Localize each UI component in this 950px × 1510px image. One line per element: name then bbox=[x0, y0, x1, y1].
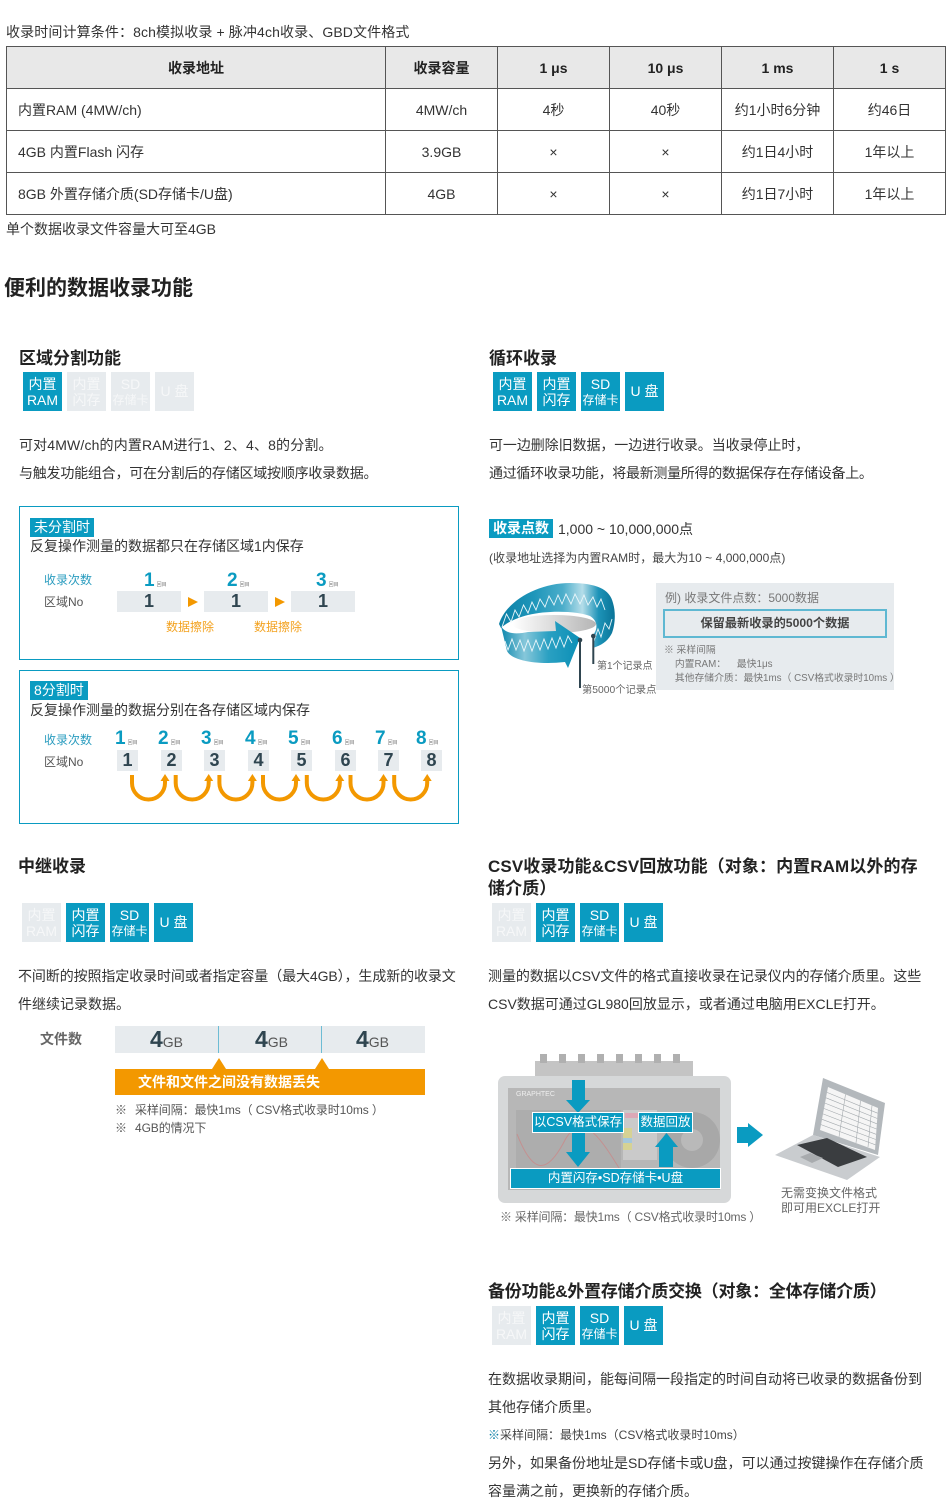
text: 8 divisions description: 反复操作测量的数据分别在各存储区域内保存 bbox=[30, 702, 310, 718]
text: area division description: 可对4MW/ch的内置RAM进行1、2、4、8的分割。 bbox=[19, 437, 333, 453]
table: recording capacity: 1年以上 bbox=[865, 144, 914, 160]
label: data erase 2: 数据擦除 bbox=[254, 620, 302, 634]
label: data erase 1: 数据擦除 bbox=[166, 620, 214, 634]
text: opens in EXCEL: 无需变换文件格式 bbox=[781, 1186, 877, 1200]
badges: loop recording storage: 内置 bbox=[542, 376, 570, 392]
table: recording capacity: 约46日 bbox=[868, 102, 911, 118]
badges: backup storage: 内置 bbox=[498, 1310, 526, 1326]
counts 1 to 8: 6 回目 bbox=[332, 728, 355, 749]
table: recording capacity: 约1日4小时 bbox=[742, 144, 813, 160]
text: opens in EXCEL: 即可用EXCLE打开 bbox=[781, 1200, 880, 1214]
table: recording capacity: 40秒 bbox=[651, 102, 680, 118]
badges: CSV storage: 存储卡 bbox=[581, 924, 618, 938]
text: backup description: ※采样间隔：最快1ms（CSV格式收录时10ms） bbox=[488, 1428, 745, 1442]
table: recording capacity: × bbox=[661, 144, 670, 160]
text: sampling interval note: ※ 采样间隔 bbox=[664, 645, 716, 656]
tag: without division: 未分割时 bbox=[34, 519, 90, 535]
area cell 1 bbox=[117, 591, 181, 612]
label: storage media bbox=[510, 1168, 721, 1189]
area cells 1 to 8: 8 bbox=[426, 750, 436, 770]
badges: area division storage bbox=[23, 372, 194, 411]
badges: relay recording storage: SD bbox=[120, 907, 139, 923]
table: recording capacity: 4MW/ch bbox=[416, 102, 467, 118]
counts 1 to 8: 8 回目 bbox=[416, 728, 439, 749]
badges: CSV storage: 内置 bbox=[542, 907, 570, 923]
label: record count: 收录次数 bbox=[44, 573, 92, 587]
label: save as CSV bbox=[532, 1112, 624, 1133]
text: backup description: 容量满之前，更换新的存储介质。 bbox=[488, 1483, 698, 1499]
text: sampling interval note: 其他存储介质：最快1ms（ CSV格式收录时10ms ） bbox=[675, 673, 900, 684]
heading: CSV recording: CSV收录功能&CSV回放功能（对象：内置RAM以外的存 bbox=[488, 857, 918, 876]
label: area number: 区域No bbox=[44, 755, 83, 769]
counts 1 to 8: 7 回目 bbox=[375, 728, 398, 749]
badges: CSV storage: U 盘 bbox=[630, 914, 658, 930]
table: recording capacity: 4秒 bbox=[543, 102, 564, 118]
table: recording capacity: 1 ms bbox=[762, 60, 793, 76]
area cell 1: 1 bbox=[144, 591, 154, 611]
counts 1 to 8: 2 回目 bbox=[158, 728, 181, 749]
text: file capacity note: 单个数据收录文件容量大可至4GB bbox=[6, 221, 216, 237]
badges: loop recording storage: 存储卡 bbox=[582, 393, 618, 407]
chart: file segments: 4GB bbox=[356, 1026, 389, 1052]
arrow: to laptop bbox=[737, 1123, 763, 1147]
area cell 2 bbox=[204, 591, 268, 612]
text: relay recording description bbox=[18, 968, 456, 1012]
text: sampling interval note bbox=[664, 644, 900, 684]
badges: loop recording storage: U 盘 bbox=[630, 383, 658, 399]
area cells 1 to 8: 4 bbox=[253, 750, 264, 770]
chart: file segments bbox=[115, 1026, 425, 1053]
table: recording capacity: 4GB 内置Flash 闪存 bbox=[18, 144, 144, 160]
heading: CSV recording bbox=[488, 857, 918, 898]
text: backup description: 另外，如果备份地址是SD存储卡或U盘，可以通过按键操作在存储介质 bbox=[488, 1455, 924, 1471]
table: recording capacity: 收录容量 bbox=[414, 60, 470, 76]
panel: backup function bbox=[488, 1282, 924, 1499]
badges: loop recording storage: 闪存 bbox=[542, 392, 570, 408]
text: internal RAM range: (收录地址选择为内置RAM时，最大为10 ~ 4,000,000点) bbox=[489, 551, 785, 565]
count: third: 3 回目 bbox=[316, 570, 339, 591]
panel: CSV recording and playback bbox=[488, 857, 921, 1224]
badges: area division storage: SD bbox=[121, 376, 140, 392]
heading: relay recording: 中继收录 bbox=[18, 857, 86, 876]
counts 1 to 8 bbox=[115, 728, 439, 749]
text: recording points range: 1,000 ~ 10,000,000点 bbox=[558, 521, 693, 537]
text: relay notes: 采样间隔：最快1ms（ CSV格式收录时10ms ） bbox=[135, 1103, 384, 1117]
badges: area division storage: 存储卡 bbox=[112, 393, 148, 407]
icon: logger device bbox=[498, 1054, 731, 1203]
text: sampling interval note: 内置RAM： 最快1μs bbox=[675, 659, 773, 670]
text: relay notes: ※ bbox=[115, 1121, 127, 1135]
heading: area division: 区域分割功能 bbox=[19, 349, 121, 368]
badges: CSV storage bbox=[492, 903, 663, 942]
icon: laptop bbox=[775, 1078, 885, 1180]
table: recording capacity: × bbox=[661, 186, 670, 202]
badges: backup storage: 闪存 bbox=[542, 1326, 570, 1342]
text: opens in EXCEL bbox=[781, 1186, 880, 1214]
table: recording capacity: 约1小时6分钟 bbox=[735, 102, 820, 118]
badges: relay recording storage: 内置 bbox=[72, 907, 100, 923]
area cells 1 to 8: 1 bbox=[122, 750, 132, 770]
callout: keep latest data bbox=[663, 609, 887, 638]
badges: area division storage: 内置 bbox=[28, 376, 56, 392]
text: loop recording description: 可一边删除旧数据，一边进行收录。当收录停止时， bbox=[489, 437, 809, 453]
badges: backup storage: RAM bbox=[496, 1326, 527, 1342]
text: loop recording description: 通过循环收录功能，将最新测量所得的数据保存在存储设备上。 bbox=[489, 465, 873, 481]
badges: CSV storage: RAM bbox=[496, 923, 527, 939]
tag: recording points: 收录点数 bbox=[493, 520, 549, 536]
counts 1 to 8: 4 回目 bbox=[245, 728, 268, 749]
table: recording capacity: 约1日7小时 bbox=[742, 186, 813, 202]
text: recording time condition: 收录时间计算条件：8ch模拟收录 + 脉冲4ch收录、GBD文件格式 bbox=[6, 24, 410, 40]
counts 1 to 8: 3 回目 bbox=[201, 728, 224, 749]
count: first: 1 回目 bbox=[144, 570, 167, 591]
label: area number: 区域No bbox=[44, 595, 83, 609]
table: recording capacity: 1 μs bbox=[539, 60, 568, 76]
panel: area division bbox=[19, 349, 459, 824]
badges: backup storage: 存储卡 bbox=[581, 1327, 618, 1341]
heading: CSV recording: 储介质） bbox=[488, 879, 556, 898]
arrow: to third bbox=[275, 597, 285, 607]
badges: area division storage: 闪存 bbox=[72, 392, 100, 408]
label: file count: 文件数 bbox=[40, 1031, 82, 1047]
banner: no data loss bbox=[115, 1058, 425, 1095]
text: relay recording description: 不间断的按照指定收录时间或者指定容量（最大4GB），生成新的收录文 bbox=[18, 968, 456, 984]
table: recording capacity: 10 μs bbox=[648, 60, 683, 76]
chart: file segments: 4GB bbox=[150, 1026, 183, 1052]
banner: no data loss: 文件和文件之间没有数据丢失 bbox=[138, 1074, 320, 1090]
label: storage media: 内置闪存•SD存储卡•U盘 bbox=[548, 1171, 683, 1185]
label: save as CSV: 以CSV格式保存 bbox=[534, 1115, 622, 1129]
text: relay notes bbox=[115, 1103, 384, 1135]
text: relay recording description: 件继续记录数据。 bbox=[18, 996, 130, 1012]
arrow: to second bbox=[188, 597, 198, 607]
icon: loop ribbon bbox=[499, 583, 615, 688]
counts 1 to 8: 5 回目 bbox=[288, 728, 311, 749]
text: CSV description bbox=[488, 968, 921, 1012]
area cell 2: 1 bbox=[231, 591, 241, 611]
badges: area division storage: 内置 bbox=[72, 376, 100, 392]
label: data playback bbox=[638, 1112, 693, 1133]
table: recording capacity bbox=[6, 46, 946, 215]
label: 5000th record point: 第5000个记录点 bbox=[582, 685, 656, 696]
text: CSV description: 测量的数据以CSV文件的格式直接收录在记录仪内的存储介质里。这些 bbox=[488, 968, 921, 984]
badges: backup storage bbox=[492, 1306, 663, 1345]
area cells 1 to 8: 7 bbox=[383, 750, 394, 770]
badges: backup storage: SD bbox=[590, 1310, 609, 1326]
area cell 3: 1 bbox=[318, 591, 328, 611]
callout: keep latest data: 保留最新收录的5000个数据 bbox=[700, 616, 850, 630]
table: recording capacity: 8GB 外置存储介质(SD存储卡/U盘) bbox=[18, 186, 233, 202]
curved orange arrows bbox=[130, 774, 432, 802]
badges: backup storage: U 盘 bbox=[630, 1317, 658, 1333]
text: CSV description: CSV数据可通过GL980回放显示，或者通过电脑用EXCLE打开。 bbox=[488, 996, 885, 1012]
text: backup description: 其他存储介质里。 bbox=[488, 1399, 600, 1415]
badges: CSV storage: SD bbox=[590, 907, 609, 923]
heading: backup function: 备份功能&外置存储介质交换（对象：全体存储介质） bbox=[488, 1282, 886, 1301]
text: backup description bbox=[488, 1371, 924, 1499]
badges: relay recording storage: 闪存 bbox=[72, 923, 100, 939]
text: area division description bbox=[19, 437, 377, 481]
arrow: down from inputs bbox=[566, 1080, 590, 1167]
table: recording capacity: 收录地址 bbox=[168, 60, 224, 76]
heading: loop recording: 循环收录 bbox=[489, 349, 557, 368]
count: second: 2 回目 bbox=[227, 570, 250, 591]
panel: example bbox=[656, 583, 894, 690]
panel: without division bbox=[19, 506, 459, 660]
chart: file segments: 4GB bbox=[255, 1026, 288, 1052]
badges: relay recording storage: 内置 bbox=[28, 907, 56, 923]
badges: area division storage: U 盘 bbox=[160, 383, 188, 399]
badges: loop recording storage bbox=[493, 372, 664, 411]
icon: logger device: GRAPHTEC bbox=[516, 1091, 555, 1098]
area cells 1 to 8: 6 bbox=[340, 750, 350, 770]
text: relay notes: 4GB的情况下 bbox=[135, 1121, 206, 1135]
table: recording capacity: 3.9GB bbox=[422, 144, 461, 160]
badges: loop recording storage: RAM bbox=[497, 392, 528, 408]
badges: relay recording storage: U 盘 bbox=[160, 914, 188, 930]
badges: relay recording storage: RAM bbox=[26, 923, 57, 939]
label: record count: 收录次数 bbox=[44, 733, 92, 747]
text: backup description: 在数据收录期间，能每间隔一段指定的时间自动将已收录的数据备份到 bbox=[488, 1371, 922, 1387]
tag: 8 divisions: 8分割时 bbox=[34, 682, 84, 698]
text: CSV sampling note: ※ 采样间隔：最快1ms（ CSV格式收录时10ms ） bbox=[500, 1210, 761, 1224]
text: loop recording description bbox=[489, 437, 873, 481]
table: recording capacity: 1年以上 bbox=[865, 186, 914, 202]
panel: 8 divisions bbox=[19, 670, 459, 824]
table: recording capacity: 1 s bbox=[880, 60, 899, 76]
label: first record point: 第1个记录点 bbox=[597, 661, 653, 672]
counts 1 to 8: 1 回目 bbox=[115, 728, 138, 749]
badges: area division storage: RAM bbox=[27, 392, 58, 408]
area cells 1 to 8 bbox=[117, 750, 442, 771]
badges: CSV storage: 内置 bbox=[498, 907, 526, 923]
badges: relay recording storage bbox=[22, 903, 193, 942]
text: without division description: 反复操作测量的数据都只在存储区域1内保存 bbox=[30, 538, 304, 554]
area cells 1 to 8: 2 bbox=[166, 750, 176, 770]
label: data playback: 数据回放 bbox=[640, 1115, 690, 1129]
text: area division description: 与触发功能组合，可在分割后的存储区域按顺序收录数据。 bbox=[19, 465, 377, 481]
badges: backup storage: 内置 bbox=[542, 1310, 570, 1326]
text: example points: 例) 收录文件点数：5000数据 bbox=[665, 591, 819, 605]
badges: CSV storage: 闪存 bbox=[542, 923, 570, 939]
area cells 1 to 8: 3 bbox=[209, 750, 220, 770]
table: recording capacity: × bbox=[549, 144, 558, 160]
table: recording capacity: 内置RAM (4MW/ch) bbox=[18, 102, 142, 118]
panel: loop recording bbox=[489, 349, 900, 696]
image: data logger with overlays bbox=[498, 1054, 731, 1203]
table: recording capacity: 4GB bbox=[427, 186, 456, 202]
text: relay notes: ※ bbox=[115, 1103, 127, 1117]
panel: relay recording bbox=[18, 857, 456, 1135]
badges: loop recording storage: 内置 bbox=[498, 376, 526, 392]
heading: convenient recording functions: 便利的数据收录功能 bbox=[4, 277, 193, 300]
badges: relay recording storage: 存储卡 bbox=[111, 924, 148, 938]
area cells 1 to 8: 5 bbox=[296, 750, 306, 770]
table: recording capacity: × bbox=[549, 186, 558, 202]
area cell 3 bbox=[291, 591, 355, 612]
badges: loop recording storage: SD bbox=[591, 376, 610, 392]
arrow: up to playback bbox=[655, 1133, 678, 1167]
